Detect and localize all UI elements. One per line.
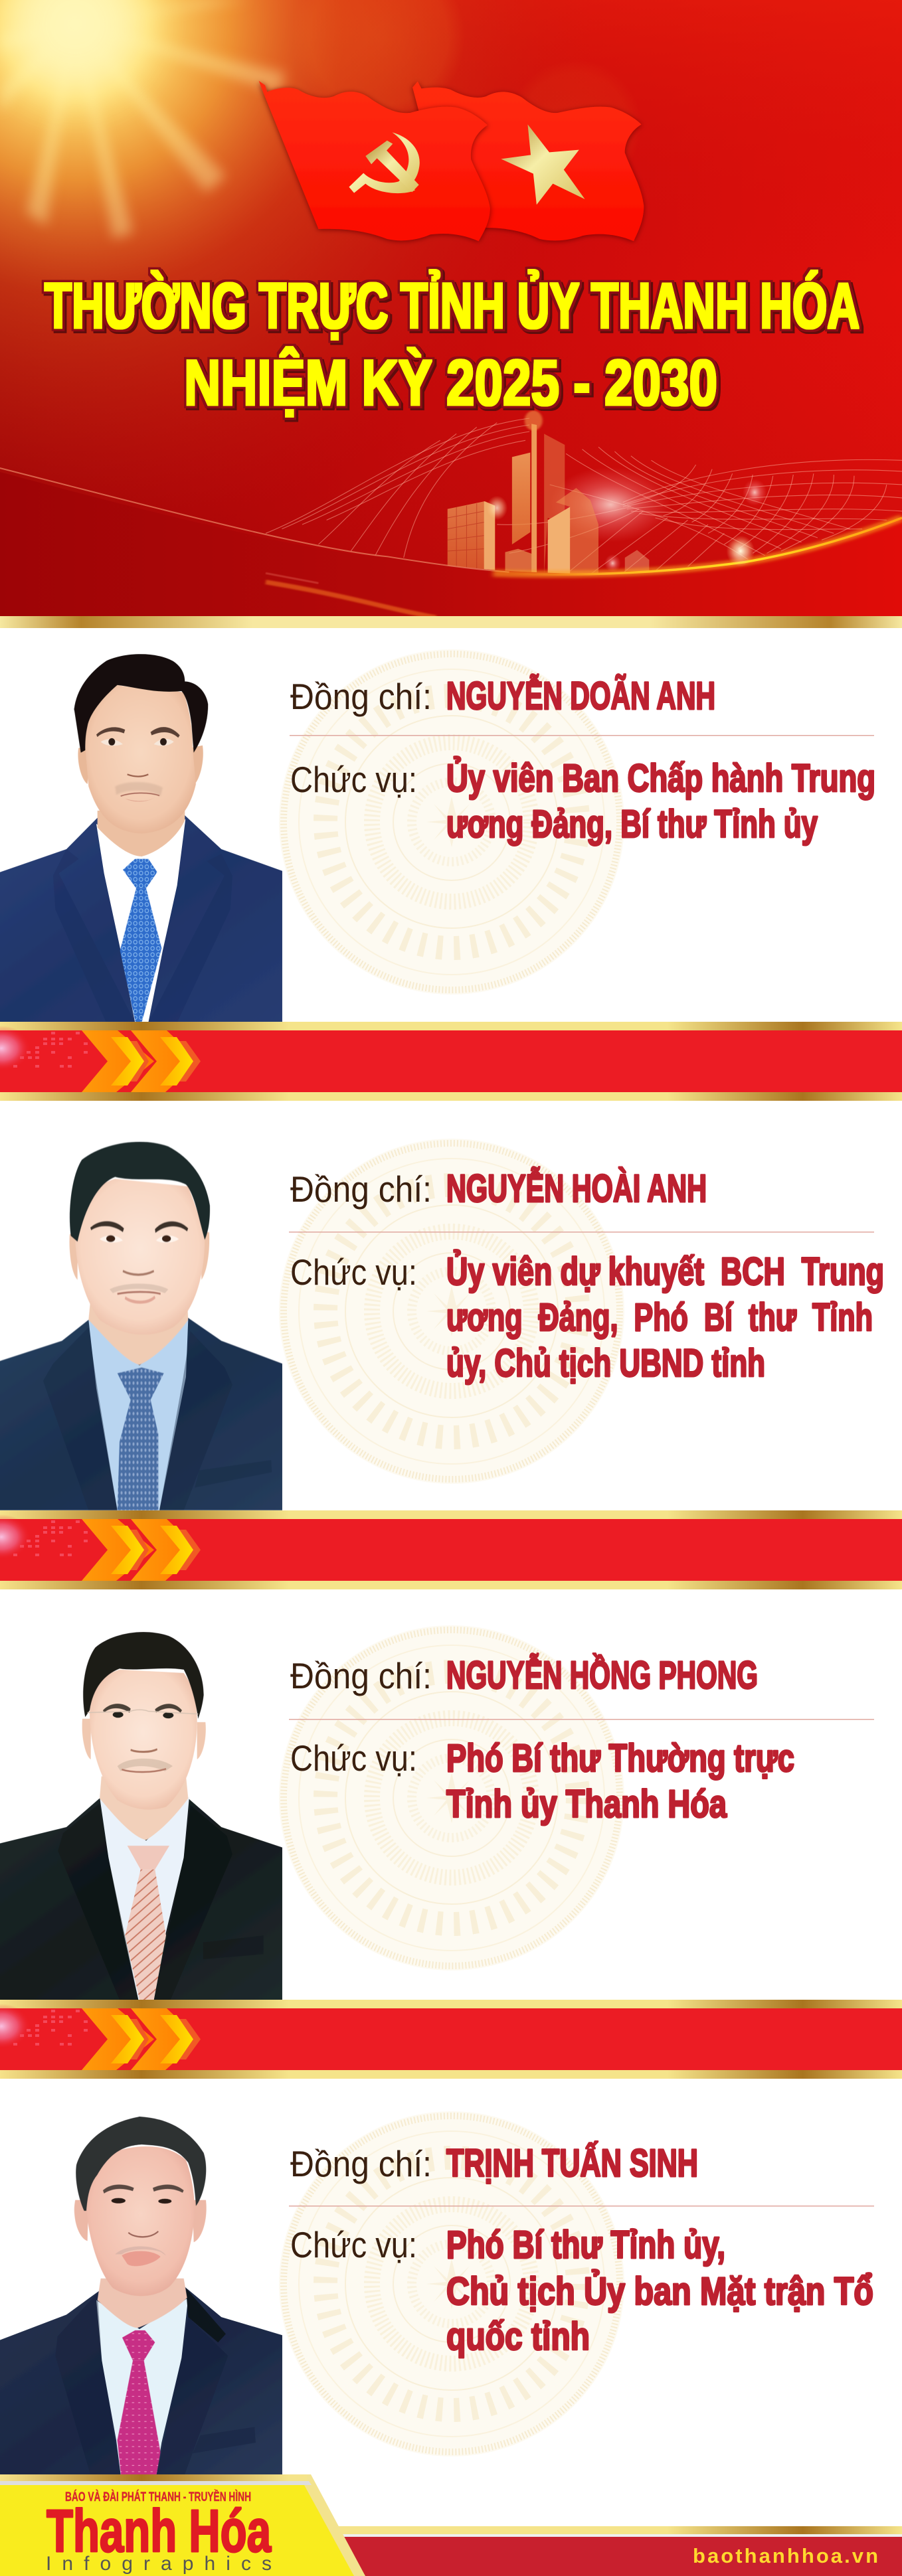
logo subtitle: Infographics	[46, 2553, 272, 2575]
position: Phó Bí thư Thường trực	[446, 1737, 794, 1780]
publisher line: BÁO VÀ ĐÀI PHÁT THANH - TRUYỀN HÌNH	[65, 2490, 251, 2504]
divider band 3	[0, 2000, 902, 2079]
divider band 1	[0, 1022, 902, 1101]
flag: Party	[259, 81, 490, 241]
label and name: Đồng chí:	[290, 1655, 432, 1696]
label and name: Đồng chí:	[290, 676, 432, 717]
label and name	[290, 675, 715, 718]
city skyline and mesh	[0, 410, 902, 617]
position	[290, 1737, 794, 1826]
position	[290, 757, 875, 846]
icon: hammer and sickle	[349, 132, 420, 193]
icon: star	[501, 124, 585, 204]
header banner	[0, 0, 902, 617]
panel: Nguyễn Doãn Anh	[0, 649, 875, 1022]
label and name: NGUYỄN HỒNG PHONG	[446, 1654, 758, 1697]
flag: Vietnam	[412, 82, 644, 241]
footer red band	[335, 2526, 902, 2576]
drum watermark	[279, 2111, 624, 2456]
position: Chức vụ:	[290, 1737, 417, 1779]
label and name: NGUYỄN HOÀI ANH	[446, 1167, 707, 1210]
drum watermark	[279, 649, 624, 995]
logo name: Thanh Hóa	[46, 2498, 272, 2565]
footer	[0, 2474, 902, 2576]
title: NHIỆM KỲ 2025 - 2030	[184, 347, 717, 419]
position: Chức vụ:	[290, 759, 417, 800]
drum watermark	[279, 1625, 624, 1971]
label and name: Đồng chí:	[290, 1168, 432, 1210]
position: Tỉnh ủy Thanh Hóa	[446, 1783, 727, 1826]
label and name	[290, 1654, 758, 1697]
panel: Trịnh Tuấn Sinh	[0, 2111, 874, 2483]
position: Chức vụ:	[290, 2224, 417, 2265]
portrait	[0, 1632, 282, 2000]
title	[45, 270, 859, 419]
gold strip under header	[0, 616, 902, 628]
position	[290, 2223, 873, 2358]
lower swoosh	[0, 467, 902, 617]
panel: Nguyễn Hoài Anh	[0, 1139, 884, 1510]
divider	[289, 1719, 874, 1720]
flags	[259, 81, 644, 241]
panel: Nguyễn Hồng Phong	[0, 1625, 874, 2000]
drum watermark	[279, 1139, 624, 1484]
label and name	[290, 1167, 707, 1210]
divider	[289, 2206, 874, 2207]
label and name: TRỊNH TUẤN SINH	[446, 2142, 698, 2185]
label and name: Đồng chí:	[290, 2143, 432, 2184]
position: Chức vụ:	[290, 1251, 417, 1293]
portrait	[0, 1142, 282, 1510]
portrait	[0, 2117, 282, 2483]
portrait	[0, 654, 282, 1022]
label and name: NGUYỄN DOÃN ANH	[446, 675, 715, 718]
divider	[290, 735, 874, 736]
website: baothanhhoa.vn	[693, 2544, 878, 2567]
label and name	[290, 2142, 698, 2185]
divider band 2	[0, 1510, 902, 1589]
position	[290, 1250, 884, 1385]
footer logo plate	[0, 2474, 365, 2576]
position: ủy, Chủ tịch UBND tỉnh	[446, 1342, 765, 1385]
position: quốc tỉnh	[446, 2315, 590, 2358]
position: Phó Bí thư Tỉnh ủy,	[446, 2223, 725, 2267]
